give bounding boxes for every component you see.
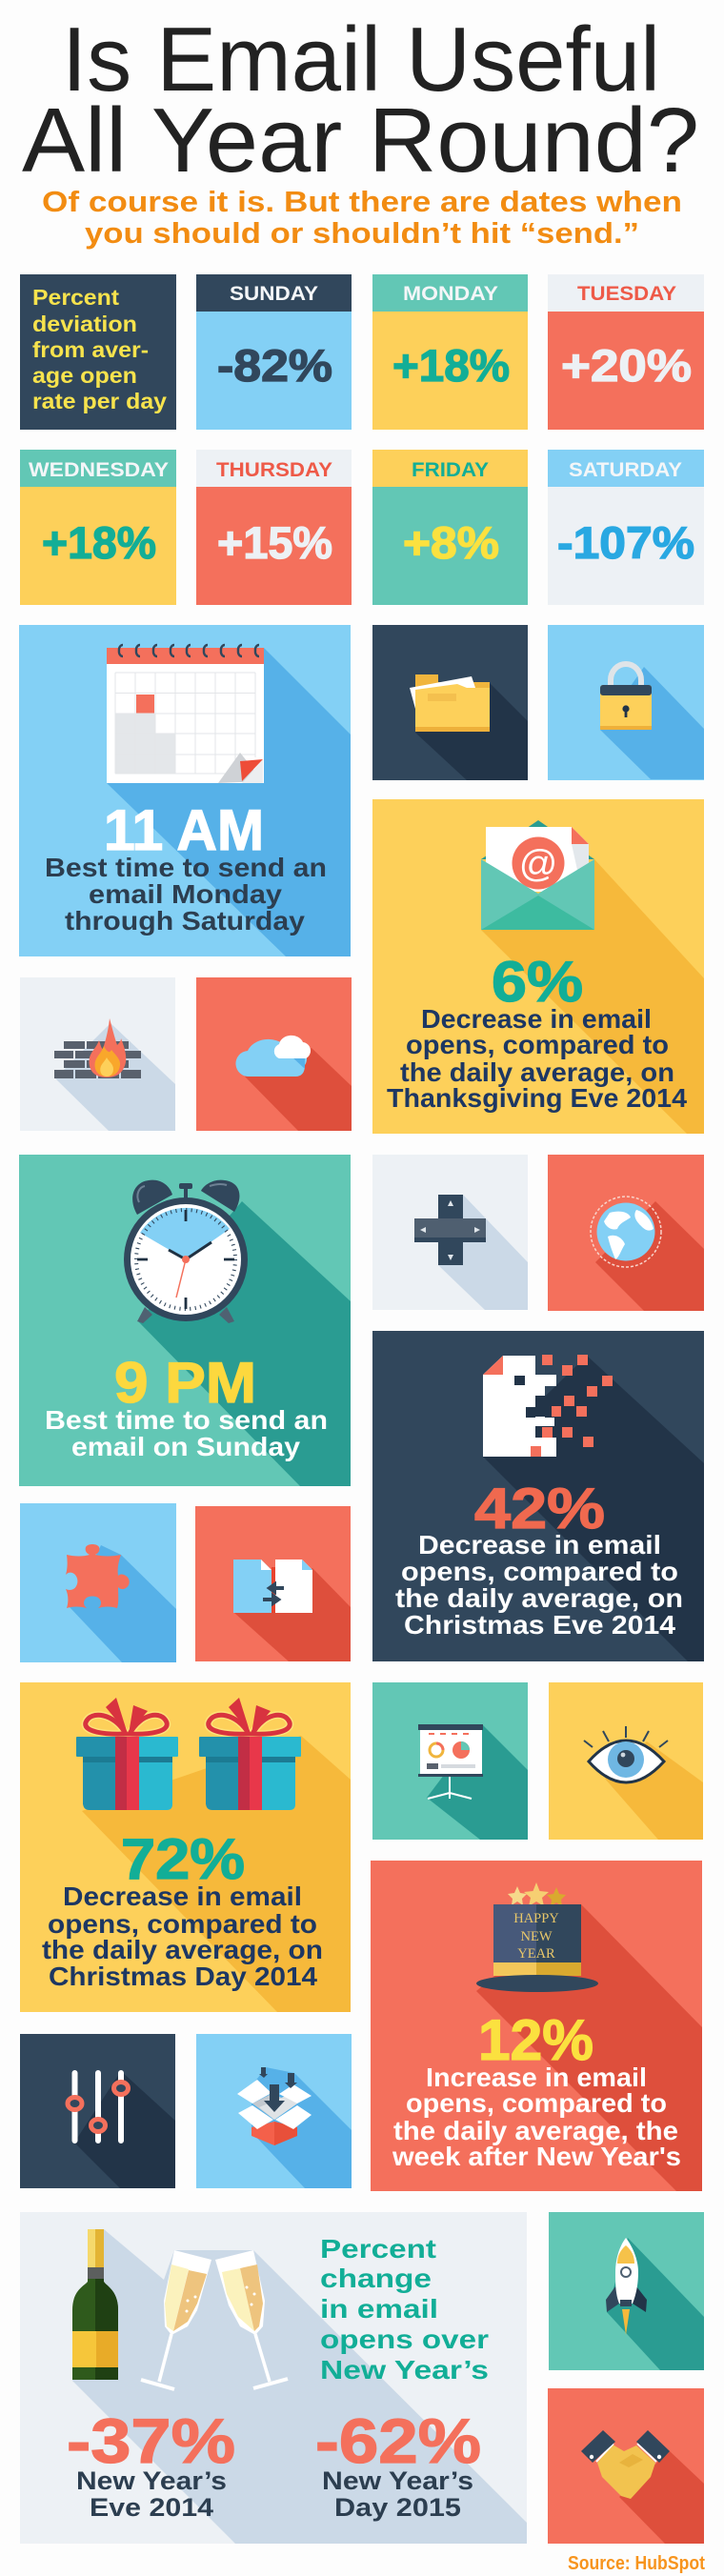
panel: percent deviation key: deviation bbox=[32, 312, 137, 336]
caption: Christmas Eve: Decrease in email bbox=[418, 1530, 661, 1560]
caption: Thanksgiving Eve: Thanksgiving Eve 2014 bbox=[387, 1083, 687, 1113]
icon: calendar bbox=[107, 645, 264, 783]
panel: firewall bbox=[20, 977, 175, 1131]
panel: file transfer bbox=[195, 1506, 351, 1661]
panel: puzzle piece bbox=[20, 1503, 176, 1662]
panel: globe bbox=[548, 1155, 704, 1311]
panel: Wednesday: +18% bbox=[42, 517, 156, 568]
icon: padlock bbox=[600, 664, 652, 730]
heading: percent change in email opens: opens over bbox=[320, 2324, 489, 2354]
panel: folder bbox=[372, 625, 528, 780]
stat: 72%: 72% bbox=[121, 1827, 245, 1891]
caption: best time Monday through Saturday: through Saturday bbox=[65, 906, 305, 936]
icon: New Year top hat: YEAR bbox=[517, 1946, 555, 1962]
icon: presentation board bbox=[418, 1724, 483, 1799]
caption: best time Monday through Saturday bbox=[45, 853, 327, 936]
panel: percent deviation key: age open bbox=[32, 363, 137, 388]
panel: handshake bbox=[548, 2388, 704, 2544]
icon: eye bbox=[584, 1726, 668, 1782]
caption: week after New Year: the daily average, the bbox=[393, 2116, 678, 2145]
caption: week after New Year bbox=[392, 2063, 681, 2171]
panel: percent deviation key: from aver- bbox=[32, 337, 149, 362]
heading: percent change in email opens: Percent bbox=[320, 2234, 436, 2264]
panel: Tuesday: TUESDAY bbox=[577, 283, 676, 305]
stat: 9 PM: 9 PM bbox=[114, 1351, 256, 1415]
panel: Tuesday: +20% bbox=[561, 340, 692, 391]
caption: Christmas Eve: opens, compared to bbox=[401, 1557, 678, 1586]
icon: handshake bbox=[581, 2430, 670, 2499]
icon: New Year top hat bbox=[476, 1882, 598, 1992]
panel: 11 AM bbox=[19, 625, 351, 956]
icon: champagne bottle bbox=[72, 2229, 118, 2380]
panel: percent deviation key: rate per day bbox=[32, 389, 167, 413]
panel: Friday: FRIDAY bbox=[412, 459, 489, 481]
title: Is Email Useful bbox=[62, 9, 660, 111]
panel: 12 percent week after New Year bbox=[371, 1861, 702, 2191]
caption: Thanksgiving Eve: opens, compared to bbox=[406, 1030, 669, 1059]
panel: Saturday: SATURDAY bbox=[569, 459, 682, 481]
source: Source: HubSpot bbox=[568, 2553, 705, 2574]
subtitle bbox=[42, 185, 682, 250]
caption: week after New Year: week after New Year's bbox=[392, 2142, 681, 2171]
panel: Thursday: +15% bbox=[217, 517, 332, 568]
panel: New Year's percent change bbox=[20, 2212, 527, 2544]
heading: percent change in email opens bbox=[320, 2234, 489, 2385]
stat: New Year's Day bbox=[315, 2405, 481, 2522]
icon: cloud bbox=[235, 1036, 311, 1077]
subtitle: Of course it is. But there are dates when bbox=[42, 185, 682, 218]
stat: New Year's Day: Day 2015 bbox=[334, 2493, 461, 2522]
icon: New Year top hat: HAPPY bbox=[513, 1911, 559, 1926]
icon: envelope: @ bbox=[519, 843, 557, 885]
panel: Sunday: -82% bbox=[217, 340, 332, 391]
caption: Christmas Day: the daily average, on bbox=[42, 1935, 323, 1964]
caption: Thanksgiving Eve: Decrease in email bbox=[421, 1004, 652, 1034]
caption: Christmas Day: Christmas Day 2014 bbox=[49, 1962, 317, 1991]
caption: best time Sunday bbox=[45, 1405, 328, 1461]
panel: Saturday: -107% bbox=[557, 517, 694, 568]
caption: Christmas Day bbox=[42, 1882, 323, 1991]
panel: Friday: +8% bbox=[403, 517, 499, 568]
caption: Christmas Day: opens, compared to bbox=[48, 1909, 317, 1939]
panel: Friday bbox=[372, 450, 528, 605]
caption: Christmas Eve: Christmas Eve 2014 bbox=[404, 1610, 675, 1640]
panel: Monday: MONDAY bbox=[403, 283, 498, 305]
stat: 12%: 12% bbox=[478, 2008, 593, 2072]
caption: Christmas Eve bbox=[395, 1530, 683, 1640]
panel: 6 percent Thanksgiving Eve bbox=[372, 799, 704, 1134]
title bbox=[22, 9, 699, 191]
icon: firewall bbox=[54, 1018, 141, 1078]
panel: Wednesday bbox=[20, 450, 176, 605]
icon: puzzle piece bbox=[66, 1544, 130, 1608]
caption: best time Sunday: Best time to send an bbox=[45, 1405, 328, 1435]
icon: open box with arrows bbox=[237, 2067, 312, 2145]
panel: 72 percent Christmas Day bbox=[20, 1682, 351, 2012]
heading: percent change in email opens: change bbox=[320, 2264, 432, 2293]
stat: New Year's Eve: Eve 2014 bbox=[90, 2493, 213, 2522]
icon: directional cross bbox=[414, 1195, 486, 1265]
caption: best time Monday through Saturday: Best time to send an bbox=[45, 853, 327, 882]
icon: rocket bbox=[606, 2238, 647, 2335]
icon: alarm clock bbox=[124, 1180, 248, 1323]
panel: Saturday bbox=[548, 450, 704, 605]
panel: open box bbox=[196, 2034, 352, 2188]
panel: Monday bbox=[372, 274, 528, 430]
title: All Year Round? bbox=[22, 90, 699, 191]
icon: sliders bbox=[68, 2073, 128, 2141]
stat: New Year's Day: -62% bbox=[315, 2405, 481, 2476]
heading: percent change in email opens: New Year’s bbox=[320, 2355, 489, 2385]
panel: Tuesday bbox=[548, 274, 704, 430]
stat: 6%: 6% bbox=[492, 950, 583, 1014]
stat: New Year's Eve bbox=[67, 2405, 235, 2522]
stat: 11 AM: 11 AM bbox=[104, 798, 264, 862]
panel: Thursday: THURSDAY bbox=[216, 459, 332, 481]
panel: 9 PM bbox=[19, 1155, 351, 1486]
icon: globe bbox=[591, 1197, 661, 1267]
panel: Sunday: SUNDAY bbox=[230, 283, 318, 305]
stat: 42%: 42% bbox=[474, 1477, 605, 1540]
panel: presentation board bbox=[372, 1682, 528, 1840]
caption: best time Monday through Saturday: email Monday bbox=[89, 879, 282, 909]
icon: folder bbox=[410, 674, 490, 732]
panel: percent deviation key: Percent bbox=[32, 285, 119, 310]
icon: gift left bbox=[76, 1698, 178, 1810]
panel: Monday: +18% bbox=[392, 340, 510, 391]
panel: Wednesday: WEDNESDAY bbox=[29, 459, 169, 481]
panel: arrow cross bbox=[372, 1155, 528, 1310]
panel: sliders bbox=[20, 2034, 175, 2188]
panel: Thursday bbox=[196, 450, 352, 605]
caption: week after New Year: Increase in email bbox=[426, 2063, 647, 2092]
caption: Christmas Eve: the daily average, on bbox=[395, 1583, 683, 1613]
panel: percent deviation key bbox=[20, 274, 176, 430]
caption: Thanksgiving Eve: the daily average, on bbox=[400, 1057, 674, 1087]
icon: envelope bbox=[481, 820, 594, 930]
icon: gift right bbox=[199, 1698, 301, 1810]
icon: file transfer bbox=[233, 1560, 312, 1613]
panel: rocket bbox=[549, 2212, 704, 2370]
subtitle: you should or shouldn’t hit “send.” bbox=[85, 216, 639, 250]
stat: New Year's Eve: New Year’s bbox=[76, 2466, 227, 2495]
stat: New Year's Day: New Year’s bbox=[322, 2466, 473, 2495]
panel: Sunday bbox=[196, 274, 352, 430]
caption: week after New Year: opens, compared to bbox=[406, 2088, 667, 2118]
panel: padlock bbox=[548, 625, 704, 780]
caption: Thanksgiving Eve bbox=[387, 1004, 687, 1113]
panel: 42 percent Christmas Eve bbox=[372, 1331, 704, 1661]
icon: champagne glass right bbox=[215, 2250, 288, 2388]
panel: cloud bbox=[196, 977, 352, 1131]
panel: eye bbox=[549, 1682, 703, 1840]
heading: percent change in email opens: in email bbox=[320, 2294, 438, 2324]
icon: New Year top hat: NEW bbox=[520, 1929, 553, 1944]
caption: best time Sunday: email on Sunday bbox=[71, 1432, 300, 1461]
caption: Christmas Day: Decrease in email bbox=[63, 1882, 302, 1911]
icon: disintegrating document bbox=[483, 1355, 613, 1457]
stat: New Year's Eve: -37% bbox=[67, 2405, 235, 2476]
icon: champagne glass left bbox=[141, 2250, 211, 2389]
